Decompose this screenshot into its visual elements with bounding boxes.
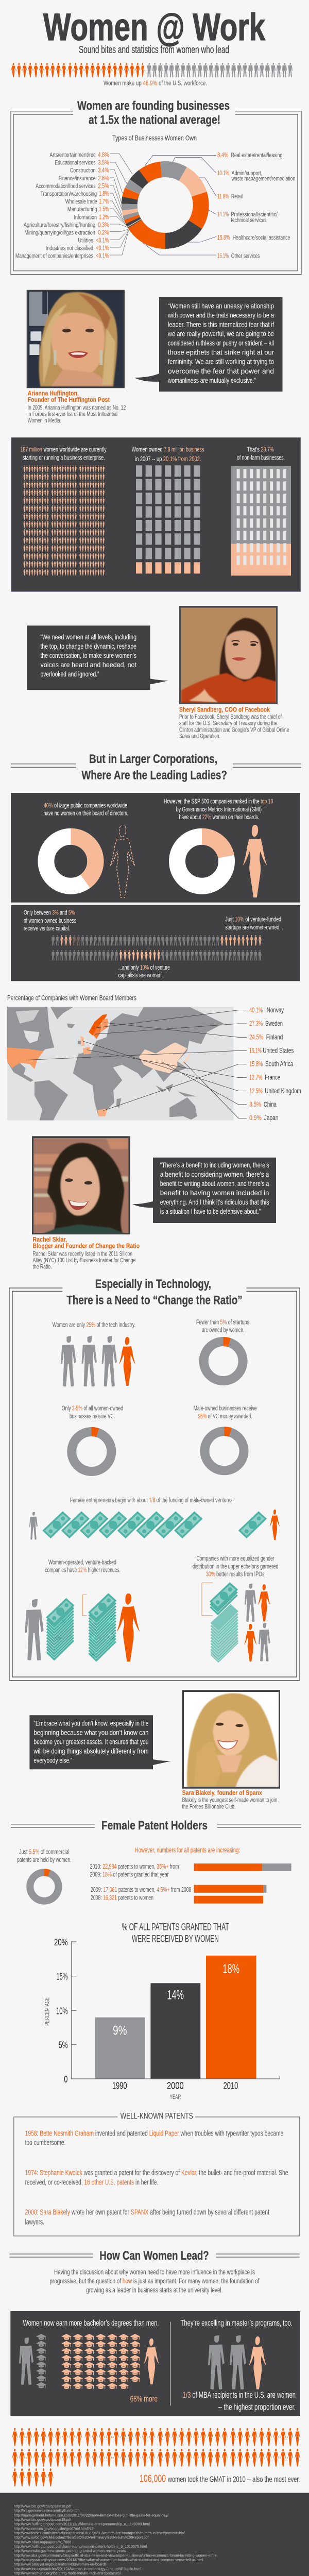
panel title: WELL-KNOWN PATENTS (121, 2111, 193, 2121)
quote: Arianna Huffington: “Women still have an uneasy relationship (168, 301, 274, 310)
stat: 12% higher revenues (25, 1558, 140, 1662)
quote: Sheryl Sandberg: the top, to change the dynamic, reshape (40, 642, 136, 650)
left legend: 2.5% (98, 182, 109, 190)
stat: patents increasing: 2009: 17,061 patents to women, 4.5%+ from 2008 (91, 1886, 192, 1893)
sources (14, 2504, 217, 2576)
panel: founding businesses (11, 99, 301, 275)
stat: 7.8 million businesses: in 2007 -- up 20.1% from 2002. (135, 455, 201, 463)
stat: 12% higher revenues: companies have 12% higher revenues. (45, 1566, 121, 1574)
left legend: Accommodation/food services (36, 183, 96, 190)
text: 3% and 5%: receive venture capital. (24, 924, 70, 932)
panel: well-known patents (14, 2111, 299, 2236)
right legend: Professional/scientific/ (231, 212, 278, 218)
sources: http://www.nwbc.gov/sites/default/files/SBO%20Preliminary%20Results%20Report.pdf (14, 2535, 149, 2540)
caption: Rachel Sklar: the Ratio. (33, 1263, 52, 1270)
stat: patents increasing: 2008: 16,321 patents to women (91, 1893, 153, 1901)
stat: 40% no women: have no women on their board of directors. (44, 809, 128, 817)
intro paragraph (49, 2268, 260, 2294)
text: 3% and 5%: of women-owned business (24, 917, 76, 924)
panel: change the ratio (9, 1277, 300, 1681)
photo: Rachel Sklar (32, 1136, 130, 1234)
sources: http://management.fortune.cnn.com/2011/04/22/more-female-mbas-but-little-gains-for-equal-pay/ (14, 2513, 169, 2517)
patent: 2000: lawyers. (25, 2218, 44, 2226)
patent: 1974 (25, 2169, 288, 2187)
heading: how can women lead: How Can Women Lead? (99, 2249, 209, 2263)
sources: http://www.census.gov/econ/sbo/get07sof.html?12 (14, 2526, 94, 2531)
left legend: 1.7% (99, 197, 109, 205)
right legend: 8.4% (217, 151, 229, 159)
heading: technology: Especially in Technology, (95, 1277, 211, 1291)
stat: 7.8 million businesses: Women owned 7.8 million business (132, 446, 204, 453)
sources: http://www.nwbc.gov/news/more-patents-granted-women-recent-years (14, 2549, 126, 2553)
map legend: 27.3% (249, 1019, 263, 1027)
quote: Sara Blakely: “Embrace what you don’t know, especially in the (33, 1719, 149, 1727)
right legend: Retail (231, 194, 243, 200)
right legend: 14.1% (217, 210, 229, 218)
bar chart: percent of patents received by women: PERCENTAGE (43, 1997, 50, 2026)
caption: Rachel Sklar: Rachel Sklar was recently listed in the 2011 Silicon (33, 1250, 132, 1257)
sources: http://www.bls.gov/cps/cpsaat18.pdf (14, 2517, 72, 2522)
bar chart: percent of patents received by women: 15% (57, 1972, 68, 1982)
pictogram: capitalists row (52, 950, 262, 961)
caption: Sheryl Sandberg: Sales and Operation. (179, 733, 220, 740)
stat: 22% on boards: have about 22% women on their boards. (179, 813, 259, 821)
left legend: Arts/entertainment/rec (49, 152, 96, 159)
heading: founding businesses: Women are founding businesses (77, 99, 230, 113)
heading: founding businesses: at 1.5x the national average! (89, 113, 220, 127)
right legend: technical services (231, 217, 267, 224)
map legend: Finland (266, 1032, 283, 1041)
stat: 28.7% building (231, 446, 291, 575)
left legend: 4.8% (98, 150, 109, 159)
bar chart: percent of patents received by women: 1990 (112, 2080, 127, 2091)
text: 10% of capitalists (118, 963, 170, 979)
caption: Arianna Huffington: Founder of The Huffington Post (28, 396, 110, 403)
stat: 22% on boards: However, the S&P 500 companies ranked in the top 10 (164, 797, 273, 805)
quote: Sara Blakely: everybody else.” (33, 1756, 73, 1764)
sources: http://www.forbes.com/sites/sabrinaparsons/2011/05/03/women-are-stronger-than-men-in-entrepreneurship/ (14, 2531, 185, 2535)
quote: Arianna Huffington: we are really powerful, we are going to be (167, 330, 274, 338)
photo: Sara Blakely (182, 1690, 280, 1789)
caption: Sara Blakely (182, 1789, 277, 1810)
stat: 5.5% of commercial patents: Just 5.5% of commercial (19, 1848, 70, 1856)
bar chart: percent of patents received by women: 18% (222, 1962, 239, 1976)
quote: Sheryl Sandberg: “We need women at all levels, including (40, 633, 136, 641)
quote: Rachel Sklar (132, 1158, 276, 1223)
quote: Arianna Huffington: leader. There is this internalized fear that if (168, 320, 274, 328)
map legend: 40.1% (249, 1006, 263, 1014)
sources: http://www.inc.com/articles/201104/women-in-technology-face-uphill-battle.html (14, 2566, 141, 2571)
left legend: Transportation/warehousing (40, 191, 97, 197)
stat: 187 million (20, 446, 107, 575)
stat: 5% of startups: are owned by women. (202, 1326, 244, 1334)
stat: 28.7% building: of non-farm businesses. (237, 453, 285, 461)
quote: Arianna Huffington: overcome the fear that power and (168, 367, 274, 375)
left legend: Management of companies/enterprises (15, 253, 93, 260)
caption: Arianna Huffington (28, 390, 126, 424)
quote: Rachel Sklar: is a situation I have to be defensive about.” (160, 1207, 261, 1215)
left legend: 0.2% (98, 229, 109, 236)
icon: dashed woman (110, 825, 135, 898)
quote: Rachel Sklar: benefit to having women included in (160, 1189, 269, 1197)
quote: Arianna Huffington: considered ruthless or pushy or strident – all (168, 339, 274, 347)
bar chart: percent of patents received by women: 5% (59, 2040, 68, 2050)
caption: Arianna Huffington: Arianna Huffington, (28, 390, 79, 397)
map legend (249, 1006, 301, 1122)
photo: Sheryl Sandberg (179, 606, 278, 704)
heading: larger corporations: Where Are the Leading Ladies? (81, 768, 227, 782)
panel: boards (11, 793, 300, 903)
text: 10% of startups: Just 10% of venture-funded (225, 916, 281, 923)
bar chart: percent of patents received by women: 14% (167, 1988, 184, 2003)
donut: 40% (46, 837, 95, 886)
stat: 95% of VC money: 95% of VC money awarded. (198, 1412, 252, 1420)
workforce caption: Women make up 46.9% of the U.S. workforce. (104, 79, 207, 87)
right legend: 16.1% (217, 251, 229, 259)
donut: 22% (177, 837, 227, 886)
heading: larger corporations: But in Larger Corporations, (89, 752, 217, 766)
stat: 25% of tech: Women are only 25% of the tech industry. (53, 1321, 135, 1329)
stat: 22% on boards: by Governance Metrics International (GMI) (176, 805, 262, 813)
icon: solid woman (243, 825, 267, 897)
panel: venture capital (11, 905, 300, 981)
stat: 40% no women (44, 801, 128, 817)
map legend: South Africa (265, 1060, 294, 1068)
left legend: 3.5% (98, 159, 109, 166)
quote: Sheryl Sandberg: the conversation, to make sure women’s (40, 651, 136, 659)
stat: 28.7% building: That’s 28.7% (247, 446, 274, 453)
quote: Sheryl Sandberg: voices are heard and heeded, not (40, 660, 136, 669)
heading: founding businesses (77, 99, 230, 127)
sources: http://www.catalyst.org/publication/433/women-on-boards (14, 2562, 107, 2567)
patent: 2000 (25, 2208, 269, 2226)
quote: Arianna Huffington: femininity. We are still working at trying to (168, 358, 274, 366)
map legend: France (265, 1073, 280, 1081)
bar chart: percent of patents received by women: 0 (64, 2074, 67, 2084)
quote: Sara Blakely (29, 1715, 171, 1769)
text: 10% of startups (225, 916, 283, 931)
left legend: Finance/insurance (59, 176, 96, 182)
left legend: 2.6% (98, 174, 109, 182)
stat: 1/8 of funding (29, 1496, 280, 1540)
patent: 2000: 2000: Sara Blakely wrote her own patent for SPANX after being turned down by several different patent (25, 2208, 269, 2216)
stat: patents increasing: However, numbers for all patents are increasing: (135, 1845, 240, 1854)
right legend: 11.8% (217, 192, 229, 200)
map legend: Sweden (265, 1019, 283, 1027)
left legend: Manufacturing (67, 207, 97, 213)
heading: larger corporations (11, 752, 301, 782)
bar chart: percent of patents received by women: 2010 (224, 2080, 238, 2091)
map legend: 12.7% (249, 1073, 262, 1081)
bachelor's degrees (19, 2319, 159, 2404)
map title: Percentage of Companies with Women Board Members (7, 994, 136, 1002)
quote: Arianna Huffington (134, 297, 282, 392)
left legend: Utilities (78, 238, 93, 244)
bachelor's degrees: 68% more (130, 2394, 158, 2404)
panel: women entrepreneurs (11, 437, 301, 591)
stat: 5% of startups: Fewer than 5% of startups (196, 1318, 249, 1326)
bar chart: percent of patents received by women: YEAR (170, 2093, 181, 2100)
intro paragraph: progressive, but the question of how is just as important. For many women, the foundation of (49, 2277, 260, 2285)
stat: 3-5% receive VC: businesses receive VC. (70, 1412, 115, 1420)
subtitle: Sound bites and statistics from women who lead (79, 44, 229, 56)
bar chart: percent of patents received by women: % OF ALL PATENTS GRANTED THAT (122, 1922, 229, 1933)
stat: 25% of tech (53, 1321, 135, 1386)
stat: 22% on boards (164, 797, 273, 821)
map legend: 8.5% (249, 1100, 261, 1108)
right legend: Admin/support, (232, 171, 262, 177)
stat: 187 million: starting or running a business enterprise. (23, 453, 105, 461)
left legend: 3.4% (98, 166, 109, 174)
text: 10% of capitalists: capitalists are women. (118, 971, 163, 979)
bar chart: percent of patents received by women: 10% (56, 2006, 68, 2016)
left legend: 1.2% (99, 213, 109, 221)
quote: Arianna Huffington: with power and the traits necessary to be a (167, 311, 274, 319)
left legend (15, 150, 109, 260)
stat: 3-5% receive VC: Only 3-5% of all women-owned (62, 1404, 123, 1412)
quote: Sara Blakely: beginning because what you don’t know can (33, 1728, 149, 1736)
heading: technology: There is a Need to “Change the Ratio” (66, 1293, 243, 1307)
pictogram: GMAT women (12, 2428, 300, 2486)
caption: Sara Blakely: the Forbes Billionaire Club. (182, 1803, 235, 1810)
right legend: 10.1% (217, 169, 229, 177)
chart title: Types of Businesses Women Own (112, 134, 197, 142)
stat: 12% higher revenues: Women-operated, venture-backed (48, 1558, 116, 1566)
quote: Sheryl Sandberg (27, 625, 168, 690)
bar chart: percent of patents received by women: 20% (54, 1937, 68, 1947)
caption: Rachel Sklar: Blogger and Founder of Change the Ratio (33, 1243, 140, 1250)
panel: degrees (10, 2311, 300, 2416)
caption: Arianna Huffington: in Forbes first-ever list of the Most Influential (28, 411, 117, 418)
stat: 187 million: 187 million women worldwide are currently (20, 446, 107, 453)
left legend: <0.1% (96, 236, 109, 244)
caption: Rachel Sklar: Alley (NYC) 100 List by Business Insider for Change (33, 1257, 136, 1264)
master's programs (180, 2319, 296, 2412)
stat: 95% of VC money (194, 1404, 257, 1470)
left legend: Industries not classified (46, 246, 93, 252)
right legend (217, 151, 295, 259)
sources: http://www.bls.gov/cps/cpsaat18.pdf (14, 2504, 72, 2509)
intro paragraph: growing as a leader in business starts at the university level. (86, 2285, 222, 2294)
right legend: Other services (231, 253, 260, 259)
caption: Sheryl Sandberg (179, 706, 289, 740)
bar chart: percent of patents received by women: 9% (113, 2023, 127, 2038)
world map (7, 1007, 247, 1121)
right legend: Healthcare/social assistance (233, 235, 290, 241)
stat: 5.5% of commercial patents (17, 1848, 71, 1901)
quote: Rachel Sklar: “There’s a benefit to including women, there’s (160, 1161, 269, 1169)
left legend: Information (74, 214, 97, 221)
text: 3% and 5%: Only between 3% and 5% (24, 909, 75, 917)
GMAT caption: 106,000 (140, 2473, 166, 2485)
map legend: 15.8% (249, 1060, 263, 1068)
patent: 1958 (25, 2129, 283, 2147)
left legend: 1.5% (99, 205, 109, 213)
workforce pictogram (11, 63, 293, 77)
heading: technology (66, 1277, 243, 1307)
bar chart: percent of patents received by women: 2000 (167, 2080, 184, 2091)
map legend: 0.9% (249, 1113, 262, 1122)
map legend: 24.5% (249, 1032, 264, 1041)
quote: Rachel Sklar: benefit to writing about women, and there’s a (160, 1179, 269, 1188)
sources: http://www.huffingtonpost.com/2011/12/15/female-entrepreneurship_n_1149393.html (14, 2522, 150, 2527)
left legend: <0.1% (96, 244, 109, 252)
stat: patents increasing: 2010: 22,984 patents to women, 35%+ from (90, 1862, 179, 1870)
sources: http://post.nyssa.org/nyssa-news/2011/07/the-value-of-women-on-boards-what-statistics-and-common-sense-tell-us.html (14, 2557, 203, 2562)
map legend: 16.1% (249, 1046, 262, 1054)
heading: female patent holders (11, 1819, 301, 1833)
quote: Sara Blakely: become your greatest assets. It ensures that you (33, 1737, 149, 1745)
caption: Arianna Huffington: Women in Media. (28, 417, 61, 424)
stat: 95% of VC money: Male-owned businesses receive (194, 1404, 257, 1412)
caption: Rachel Sklar (33, 1236, 140, 1270)
left legend: Mining/quarrying/oil/gas extraction (25, 230, 95, 236)
left legend: 1.8% (99, 190, 109, 197)
sources: http://www.nber.org/papers/w17888 (14, 2539, 71, 2544)
caption: Sara Blakely: Sara Blakely, founder of Spanx (182, 1789, 262, 1797)
text: 3% and 5% (24, 909, 76, 932)
caption: Sheryl Sandberg: Sheryl Sandberg, COO of Facebook (179, 706, 270, 714)
left legend: <0.1% (96, 252, 109, 260)
stat: 1/8 of funding: Female entrepreneurs begin with about 1/8 of the funding of male-owned ventures. (70, 1496, 234, 1504)
patent: 1974: received, or co-received, 16 other U.S. patents in her life. (25, 2178, 158, 2187)
stat: 30% better IPOs: 30% better results from IPOs. (206, 1570, 266, 1578)
pictogram: startups row (52, 935, 262, 946)
stat: 7.8 million businesses (132, 446, 204, 573)
quote: Sheryl Sandberg: overlooked and ignored.” (40, 670, 99, 678)
bar chart: percent of patents received by women: WERE RECEIVED BY WOMEN (132, 1934, 219, 1944)
bar chart: percent of patents received by women (43, 1922, 280, 2100)
caption: Rachel Sklar: Rachel Sklar, (33, 1236, 67, 1243)
heading: female patent holders: Female Patent Holders (101, 1819, 208, 1833)
sources: http://www.women2.org/fostering-more-female-tech-entrepreneurs/ (14, 2571, 122, 2575)
stat: 5.5% of commercial patents: patents are held by women. (17, 1856, 71, 1863)
map legend: Japan (264, 1113, 278, 1122)
quote: Sara Blakely: will be doing things absolutely differently from (33, 1747, 148, 1755)
stat: 40% no women: 40% of large public companies worldwide (44, 801, 127, 809)
stat: patents increasing: 2009: 18% of patents granted that year (90, 1870, 169, 1878)
left legend: Agriculture/forestry/fishing/hunting (24, 222, 95, 228)
quote: Rachel Sklar: a benefit to considering women, there’s a (160, 1170, 269, 1178)
stat: 5% of startups (196, 1318, 249, 1381)
heading: how can women lead (9, 2249, 300, 2263)
map legend: China (264, 1100, 277, 1108)
right legend: 15.8% (217, 233, 230, 241)
sources: http://www.huffingtonpost.com/karin-kamp/women-patent-holders_b_1310575.html (14, 2544, 147, 2549)
left legend: Construction (70, 168, 96, 174)
quote: Rachel Sklar: everything. And I think it’s ridiculous that this (160, 1198, 269, 1206)
stat: 30% better IPOs (193, 1554, 278, 1663)
sources: http://bls.gov/news.release/nlsyth.nr0.htm (14, 2509, 79, 2513)
patent: 1958: too cumbersome. (25, 2139, 65, 2147)
GMAT caption (140, 2473, 300, 2485)
left legend: Educational services (55, 160, 96, 166)
footer (0, 2493, 309, 2576)
photo: Arianna Huffington (27, 290, 125, 388)
donut chart: types of businesses (115, 155, 215, 255)
map legend: 12.5% (249, 1087, 263, 1095)
map legend: United States (263, 1046, 294, 1054)
map legend: Norway (267, 1006, 284, 1014)
right legend: Real estate/rental/leasing (231, 152, 282, 159)
quote: Arianna Huffington: those epithets that strike right at our (168, 348, 274, 357)
quote: Arianna Huffington: womanliness are mutually exclusive.” (167, 376, 256, 384)
left legend: 0.3% (98, 221, 109, 228)
caption: Arianna Huffington: In 2009, Arianna Huffington was named as No. 12 (28, 404, 126, 411)
bachelor's degrees: Women now earn more bachelor’s degrees than men. (23, 2319, 159, 2328)
left legend: Wholesale trade (65, 199, 97, 205)
stat: 3-5% receive VC (62, 1404, 123, 1471)
sources: http://www.sba.gov/community/blogs/official-sba-news-and-views/open-business/urban-economic-forum-investing-women-entre (14, 2553, 217, 2557)
text: 10% of capitalists: ...and only 10% of venture (118, 963, 170, 971)
stat: patents increasing (90, 1845, 291, 1904)
